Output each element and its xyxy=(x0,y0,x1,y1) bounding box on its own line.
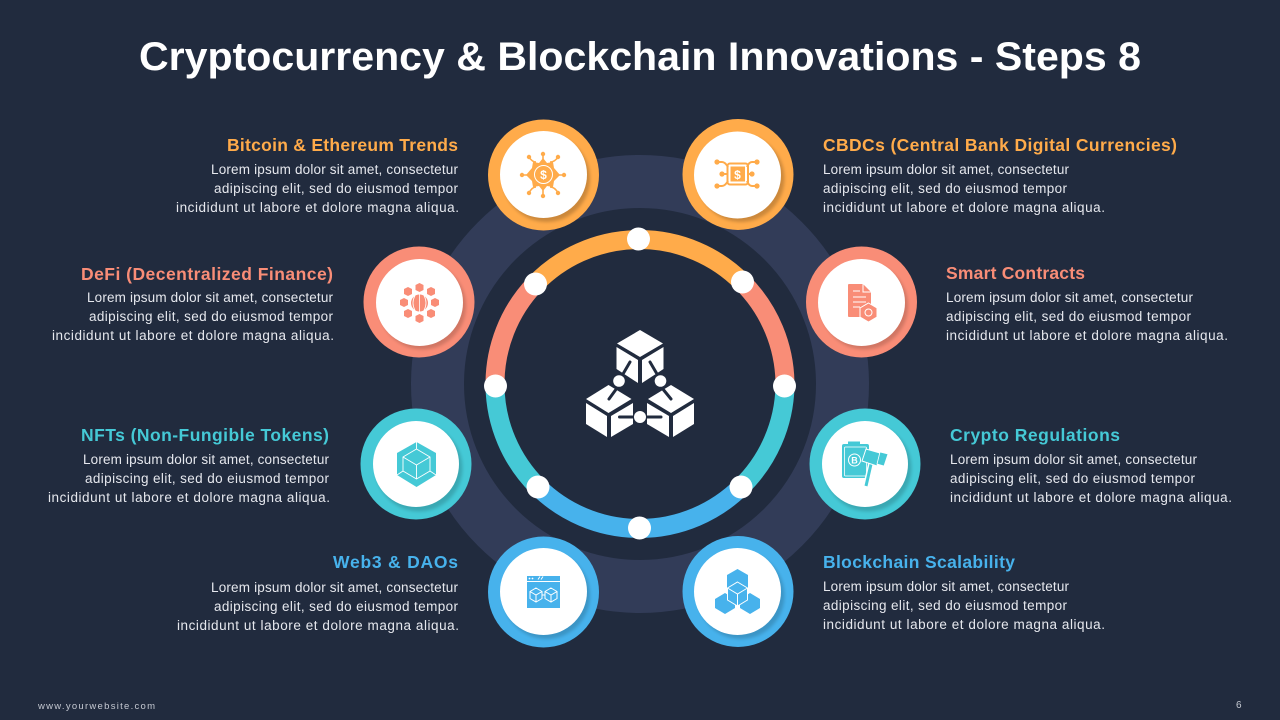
icon: web window with cubes xyxy=(527,576,560,608)
text: Smart Contracts: Lorem ipsum dolor sit amet, consectetur xyxy=(946,290,1194,305)
icon: smart contract document xyxy=(848,284,877,322)
icon: digital currency chip: $ xyxy=(734,168,741,182)
text: Blockchain Scalability: incididunt ut labore et dolore magna aliqua. xyxy=(823,617,1105,632)
text: CBDCs: Lorem ipsum dolor sit amet, consectetur xyxy=(823,162,1070,177)
text: Crypto Regulations: Lorem ipsum dolor sit amet, consectetur xyxy=(950,452,1198,467)
ring nodes xyxy=(484,228,796,540)
text: DeFi: Lorem ipsum dolor sit amet, consectetur xyxy=(87,290,334,305)
badge: NFTs xyxy=(360,408,472,520)
badge: Web3 & DAOs xyxy=(488,536,599,648)
text: Web3 & DAOs: Lorem ipsum dolor sit amet, consectetur xyxy=(211,580,458,595)
text: DeFi: DeFi (Decentralized Finance) xyxy=(81,264,333,284)
icon: clipboard and gavel: B xyxy=(851,456,858,466)
title: Cryptocurrency & Blockchain Innovations - Steps 8 xyxy=(139,35,1141,79)
text: Bitcoin & Ethereum Trends xyxy=(176,135,459,215)
badge: DeFi xyxy=(364,246,474,358)
icon: central blockchain cubes xyxy=(586,330,694,437)
background ring xyxy=(438,182,842,586)
text: CBDCs: adipiscing elit, sed do eiusmod tempor xyxy=(823,181,1068,196)
text: Smart Contracts: adipiscing elit, sed do eiusmod tempor xyxy=(946,309,1192,324)
text: DeFi: incididunt ut labore et dolore magna aliqua. xyxy=(52,328,334,343)
text: Bitcoin & Ethereum Trends: Bitcoin & Ethereum Trends xyxy=(227,135,458,155)
badge: Blockchain Scalability xyxy=(682,536,794,647)
badge: Bitcoin & Ethereum Trends xyxy=(488,120,599,230)
icon: scalable hexagon blocks xyxy=(715,569,760,614)
text: NFTs: incididunt ut labore et dolore magna aliqua. xyxy=(48,490,330,505)
text: Bitcoin & Ethereum Trends: Lorem ipsum dolor sit amet, consectetur xyxy=(211,162,458,177)
text: Smart Contracts xyxy=(946,263,1228,343)
text: CBDCs: CBDCs (Central Bank Digital Currencies) xyxy=(823,135,1177,155)
text: Web3 & DAOs: Web3 & DAOs xyxy=(333,552,458,572)
badge: Smart Contracts xyxy=(806,246,917,358)
text: Blockchain Scalability xyxy=(823,552,1105,632)
text: Web3 & DAOs: adipiscing elit, sed do eiusmod tempor xyxy=(214,599,458,614)
text: DeFi: adipiscing elit, sed do eiusmod tempor xyxy=(89,309,334,324)
text: NFTs: adipiscing elit, sed do eiusmod tempor xyxy=(85,471,330,486)
text: CBDCs xyxy=(823,135,1177,215)
text: DeFi xyxy=(52,264,334,343)
icon: bitcoin network gear: $ xyxy=(540,168,547,182)
text: Crypto Regulations: Crypto Regulations xyxy=(950,425,1120,445)
icon: NFT hexagon cube xyxy=(397,442,436,487)
text: Blockchain Scalability: adipiscing elit, sed do eiusmod tempor xyxy=(823,598,1068,613)
text: Blockchain Scalability: Lorem ipsum dolor sit amet, consectetur xyxy=(823,579,1070,594)
text: Bitcoin & Ethereum Trends: incididunt ut labore et dolore magna aliqua. xyxy=(176,200,459,215)
icon: decentralized globe with cubes xyxy=(400,283,439,323)
text: NFTs: NFTs (Non-Fungible Tokens) xyxy=(81,425,329,445)
text: Crypto Regulations: adipiscing elit, sed do eiusmod tempor xyxy=(950,471,1196,486)
text: Bitcoin & Ethereum Trends: adipiscing elit, sed do eiusmod tempor xyxy=(214,181,458,196)
segmented colour ring xyxy=(495,240,785,528)
text: Blockchain Scalability: Blockchain Scalability xyxy=(823,552,1015,572)
text: NFTs xyxy=(48,425,330,505)
text: Crypto Regulations: incididunt ut labore et dolore magna aliqua. xyxy=(950,490,1232,505)
text: Smart Contracts: Smart Contracts xyxy=(946,263,1085,283)
badge: Crypto Regulations xyxy=(810,408,920,520)
text: CBDCs: incididunt ut labore et dolore magna aliqua. xyxy=(823,200,1105,215)
page number: 6 xyxy=(1236,700,1242,711)
text: Smart Contracts: incididunt ut labore et dolore magna aliqua. xyxy=(946,328,1228,343)
text: NFTs: Lorem ipsum dolor sit amet, consectetur xyxy=(83,452,330,467)
text: Web3 & DAOs xyxy=(177,552,459,633)
text: Web3 & DAOs: incididunt ut labore et dolore magna aliqua. xyxy=(177,618,459,633)
footer website: www.yourwebsite.com xyxy=(37,701,155,712)
text: Crypto Regulations xyxy=(950,425,1232,505)
badge: CBDCs xyxy=(682,119,794,230)
